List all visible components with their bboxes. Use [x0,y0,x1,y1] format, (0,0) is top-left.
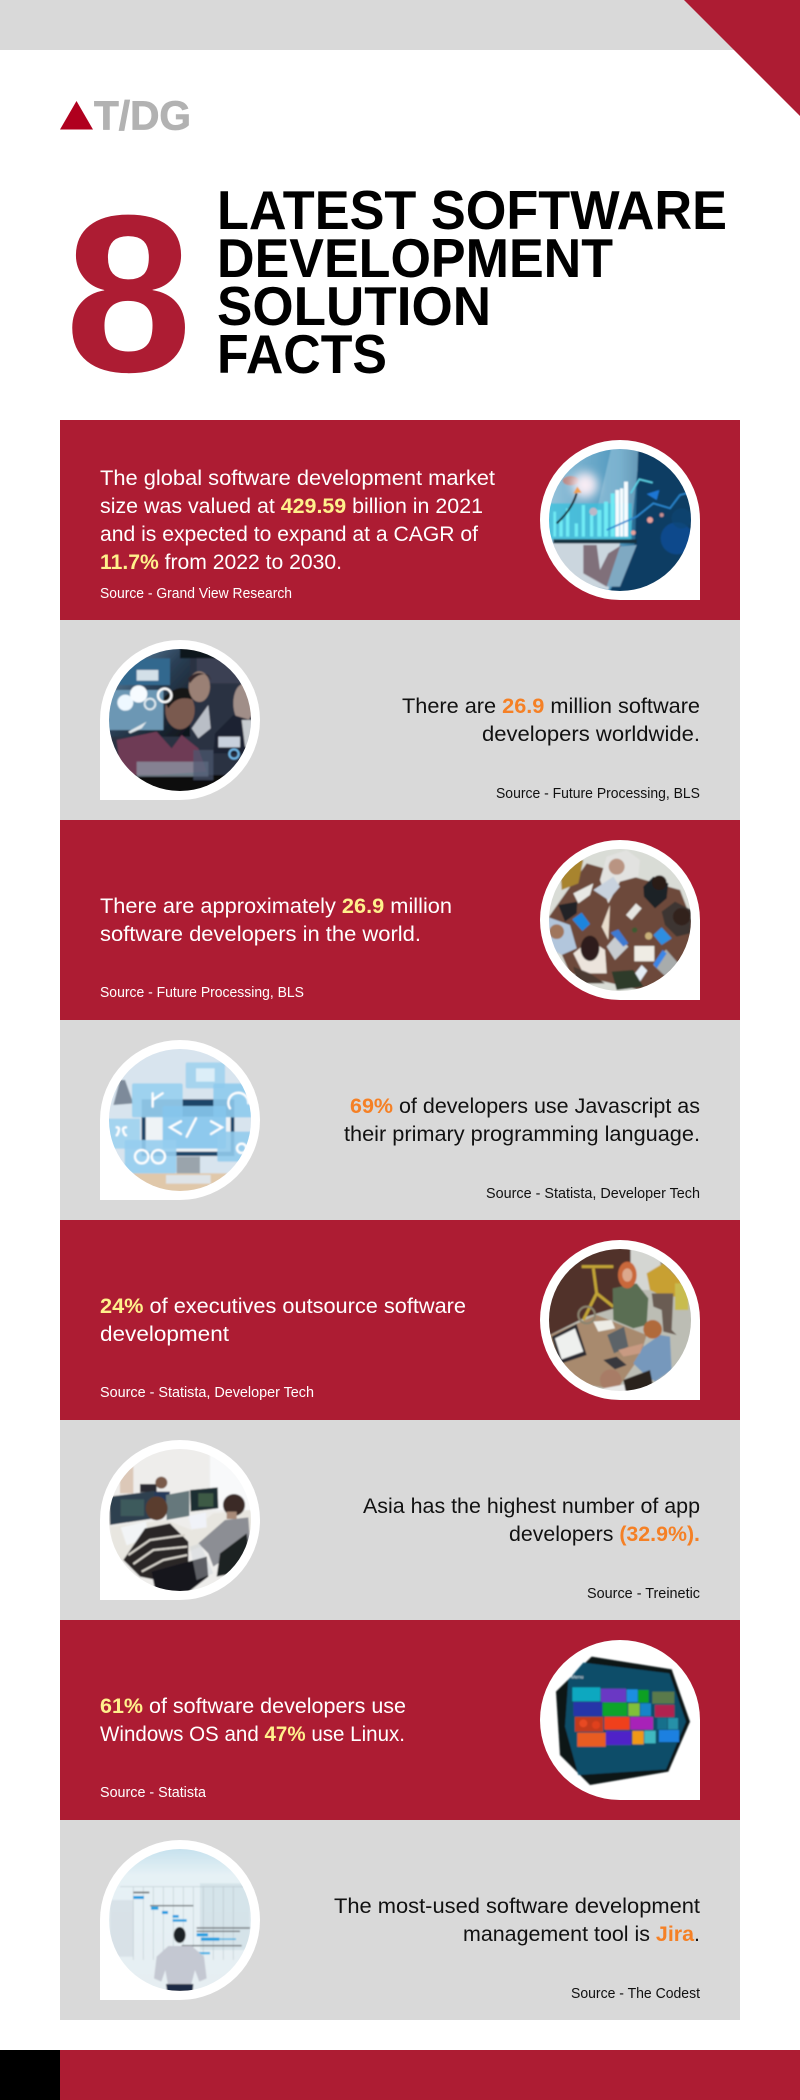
footer red bar [60,2050,800,2100]
panel background [60,1820,740,2020]
image: code on monitor [100,1040,260,1200]
panel background [60,620,740,820]
panel background [60,1620,740,1820]
panel: fact 2 developers worldwide [60,620,740,820]
title: SOLUTION [217,275,491,337]
top grey band [0,0,800,50]
fact text [334,1894,700,1946]
image: data chart on tablet [540,440,700,600]
fact text: developers worldwide. [482,722,700,746]
footer black block [0,2050,60,2100]
panel: fact 3 developers in the world [60,820,740,1020]
fact text: software developers in the world. [100,922,421,946]
fact text: The global software development market [100,466,495,490]
source: Source - Grand View Research [100,586,292,602]
image: man viewing gantt chart [100,1840,260,2002]
fact text: 69% of developers use Javascript as [350,1094,700,1118]
image: developers at monitors [100,1440,260,1600]
fact text [402,694,700,746]
fact text: developers (32.9%). [509,1522,700,1546]
panel: fact 1 market size [60,420,740,620]
fact text: size was valued at 429.59 billion in 2021 [100,494,483,518]
fact text: management tool is Jira. [463,1922,700,1946]
fact text [344,1094,700,1146]
source: Source - Future Processing, BLS [100,985,304,1001]
fact text: 61% of software developers use [100,1694,406,1718]
source: Source - Statista [100,1785,207,1801]
fact text: development [100,1322,229,1346]
panel background [60,1020,740,1220]
fact text [100,1694,406,1746]
panel background [60,1420,740,1620]
logo wordmark: T/DG [94,92,191,138]
title: LATEST SOFTWARE [217,179,727,241]
panel: fact 5 outsourcing [60,1220,740,1420]
fact text: There are 26.9 million software [402,694,700,718]
logo: T/DG [60,92,191,138]
source: Source - Future Processing, BLS [496,786,700,802]
fact text: their primary programming language. [344,1122,700,1146]
image: team around a table [540,840,700,1000]
title: FACTS [217,323,387,385]
title: DEVELOPMENT [217,227,613,289]
panel background [60,820,740,1020]
logo triangle [60,101,93,130]
image: team looking at screen [100,640,260,800]
fact text: 24% of executives outsource software [100,1294,466,1318]
image: windows tablet: Menu [571,1675,584,1681]
fact text: and is expected to expand at a CAGR of [100,522,478,546]
fact text: Windows OS and 47% use Linux. [100,1722,405,1746]
source: Source - The Codest [571,1986,700,2002]
title [217,179,727,385]
fact text [100,894,452,946]
panel: fact 7 operating systems [60,1620,740,1820]
panel background [60,1220,740,1420]
fact text [100,466,495,574]
source: Source - Statista, Developer Tech [486,1186,700,1202]
image: office meeting [540,1240,700,1400]
panel background [60,420,740,620]
fact text: 11.7% from 2022 to 2030. [100,550,342,574]
source: Source - Statista, Developer Tech [100,1385,314,1401]
fact text [100,1294,466,1346]
image: windows tablet [540,1640,700,1800]
panel: fact 4 javascript [60,1020,740,1220]
fact text: There are approximately 26.9 million [100,894,452,918]
fact text: Asia has the highest number of app [363,1494,700,1518]
big number 8: 8 [65,169,192,419]
fact text [363,1494,700,1546]
top right red corner triangle [684,0,800,116]
panel: fact 8 jira [60,1820,740,2020]
source: Source - Treinetic [587,1586,700,1602]
panel: fact 6 asia [60,1420,740,1620]
fact text: The most-used software development [334,1894,700,1918]
